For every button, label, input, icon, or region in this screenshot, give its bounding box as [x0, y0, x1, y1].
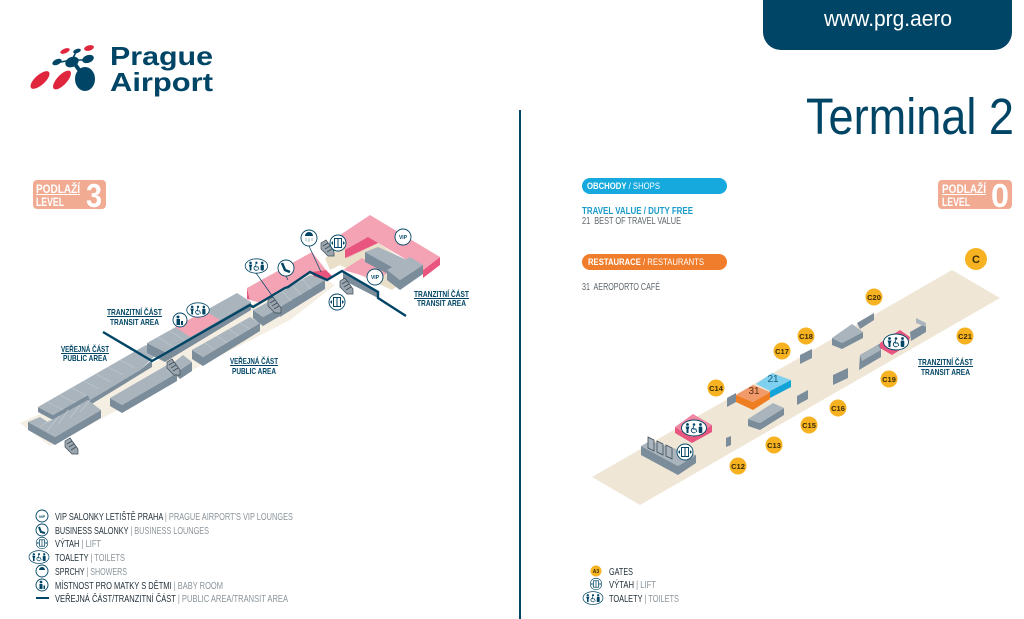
- gate C14: [708, 380, 724, 396]
- label: public area left: [61, 343, 110, 363]
- gate C20: C20: [867, 293, 881, 302]
- level badge 0: LEVEL: [942, 195, 970, 209]
- gate furniture blocks: [726, 313, 926, 447]
- map: level 3: [20, 215, 470, 454]
- heading: restaurants: [582, 254, 727, 270]
- pink zone: VIP lounges: [337, 215, 440, 280]
- gate area C: C: [972, 254, 980, 266]
- legend row: showers: [36, 565, 127, 578]
- gate C17: C17: [775, 347, 789, 356]
- legend row: VIP: VIP SALONKY LETIŠTĚ PRAHA | PRAGUE AIRPORT'S VIP LOUNGES: [55, 510, 293, 523]
- icon: VIP lower: VIP: [371, 275, 380, 281]
- text: shops list: 21 BEST OF TRAVEL VALUE: [582, 216, 681, 227]
- building blocks: central: [253, 275, 325, 326]
- text: shops list: TRAVEL VALUE / DUTY FREE: [582, 205, 693, 217]
- gate C20: [866, 288, 882, 306]
- label: transit area left: TRANZITNÍ ČÁST: [107, 306, 163, 317]
- label: transit area left: TRANSIT AREA: [110, 317, 159, 327]
- logo: Prague Airport: [28, 41, 213, 97]
- icon: toilets 2: [187, 303, 209, 317]
- icon: VIP lower: [367, 269, 383, 285]
- heading: restaurants: RESTAURACE / RESTAURANTS: [588, 257, 704, 268]
- building block: small: [173, 355, 192, 379]
- heading: shops: OBCHODY / SHOPS: [587, 181, 660, 192]
- shop 31: restaurant: 31: [748, 386, 760, 397]
- level badge 3: LEVEL: [36, 195, 64, 209]
- gate C18: C18: [799, 332, 813, 341]
- legend row: toilets: TOALETY | TOILETS: [609, 593, 679, 605]
- icon: toilets C14: [682, 420, 706, 436]
- legend row: lift: [36, 537, 101, 550]
- building block: long upper left: [38, 345, 157, 420]
- gate C21: [956, 328, 974, 344]
- gate C12: C12: [731, 462, 745, 471]
- legend row: public/transit line: VEŘEJNÁ ČÁST/TRANZITNÍ ČÁST | PUBLIC AREA/TRANSIT AREA: [55, 592, 288, 605]
- level badge 3: 3: [86, 177, 102, 214]
- building block: middle: [110, 365, 177, 413]
- header tab: website: [763, 0, 1012, 50]
- gate C19: [880, 370, 898, 388]
- label: transit area level 0: [918, 356, 974, 377]
- map: level 0: [592, 248, 1000, 505]
- legend row: baby room: MÍSTNOST PRO MATKY S DĚTMI | BABY ROOM: [55, 579, 223, 592]
- label: public area centre: [230, 355, 279, 376]
- level badge 0: PODLAŽÍ: [942, 181, 987, 196]
- text: restaurants list: 31 AEROPORTO CAFÉ: [582, 280, 660, 293]
- block: lift core: [641, 437, 696, 475]
- stairs: level 3: [65, 240, 353, 454]
- label: public area left: PUBLIC AREA: [63, 353, 107, 363]
- divider line: [519, 110, 521, 619]
- text: shops list: [582, 205, 693, 227]
- gate C17: [774, 342, 790, 360]
- icon: lift upper: [330, 235, 346, 251]
- label: transit area right: TRANSIT AREA: [417, 298, 466, 308]
- logo: Prague Airport: Prague: [110, 41, 213, 71]
- gate C15: [800, 416, 818, 434]
- floor: level 0: [592, 270, 1000, 505]
- legend row: gates: A3: [593, 569, 599, 575]
- area boundary line: [103, 271, 406, 361]
- gate C12: [730, 458, 746, 474]
- header tab: website: www.prg.aero: [823, 6, 952, 31]
- label: transit area level 0: TRANZITNÍ ČÁST: [918, 356, 974, 367]
- level badge 0: 0: [991, 177, 1009, 214]
- label: transit area level 0: TRANSIT AREA: [921, 367, 970, 377]
- zone: toilets near C14: [675, 414, 712, 443]
- legend row: VIP: VIP: [39, 514, 46, 519]
- legend row: showers: SPRCHY | SHOWERS: [55, 566, 127, 578]
- building blocks: right: [343, 247, 423, 298]
- level badge 0: [938, 177, 1012, 214]
- zone: toilets near C19: [880, 330, 910, 355]
- icon: VIP upper: VIP: [399, 235, 408, 241]
- legend: level 0: [583, 566, 679, 605]
- gate C21: C21: [958, 332, 972, 341]
- heading: shops: [582, 178, 727, 194]
- label: public area left: VEŘEJNÁ ČÁST: [61, 343, 110, 354]
- icon: lift level 0: [677, 444, 693, 460]
- gate C18: [798, 328, 814, 344]
- icon: business lounge: [278, 260, 294, 276]
- legend row: gates: [590, 566, 633, 578]
- icon: baby room: [173, 313, 187, 327]
- icon: VIP upper: [395, 229, 411, 245]
- label: public area centre: PUBLIC AREA: [232, 366, 276, 376]
- gate area C: [965, 248, 987, 270]
- shop 21: duty free: [756, 373, 791, 398]
- icon: shower: [301, 230, 317, 246]
- icon: lift lower: [329, 294, 345, 310]
- logo: Prague Airport: Airport: [110, 67, 213, 97]
- legend row: lift: VÝTAH | LIFT: [55, 537, 101, 550]
- level badge 3: [33, 177, 106, 214]
- level badge 3: PODLAŽÍ: [36, 181, 81, 196]
- leader lines: [256, 246, 321, 297]
- building block: transit side: [147, 293, 251, 362]
- icon: toilets C19: [884, 334, 908, 350]
- legend row: lift: VÝTAH | LIFT: [609, 578, 656, 591]
- legend row: business lounges: BUSINESS SALONKY | BUSINESS LOUNGES: [55, 525, 209, 537]
- legend row: gates: GATES: [609, 566, 633, 578]
- legend row: toilets: [29, 551, 125, 564]
- shop 31: restaurant: [736, 385, 770, 410]
- legend row: business lounges: [36, 524, 209, 537]
- legend: level 3: [29, 510, 293, 605]
- building block: lower centre: [192, 317, 260, 366]
- label: transit area right: [414, 288, 470, 308]
- gate C13: C13: [767, 441, 781, 450]
- gate C15: C15: [802, 421, 816, 430]
- gate C16: C16: [831, 404, 845, 413]
- pink zone: business lounge corridor: [247, 252, 332, 303]
- gate C14: C14: [709, 384, 724, 393]
- icon: toilets: [245, 259, 268, 273]
- label: transit area left: [107, 306, 163, 327]
- building block: lower left: [28, 400, 101, 445]
- gate C19: C19: [882, 375, 896, 384]
- gate C13: [766, 436, 782, 454]
- floor: level 3 public area: [20, 270, 335, 446]
- legend row: toilets: TOALETY | TOILETS: [55, 552, 125, 564]
- label: transit area right: TRANZITNÍ ČÁST: [414, 288, 470, 299]
- gate C16: [830, 400, 846, 416]
- floor: central corridor: [325, 235, 420, 290]
- label: public area centre: VEŘEJNÁ ČÁST: [230, 355, 279, 366]
- shop 21: duty free: 21: [767, 374, 779, 385]
